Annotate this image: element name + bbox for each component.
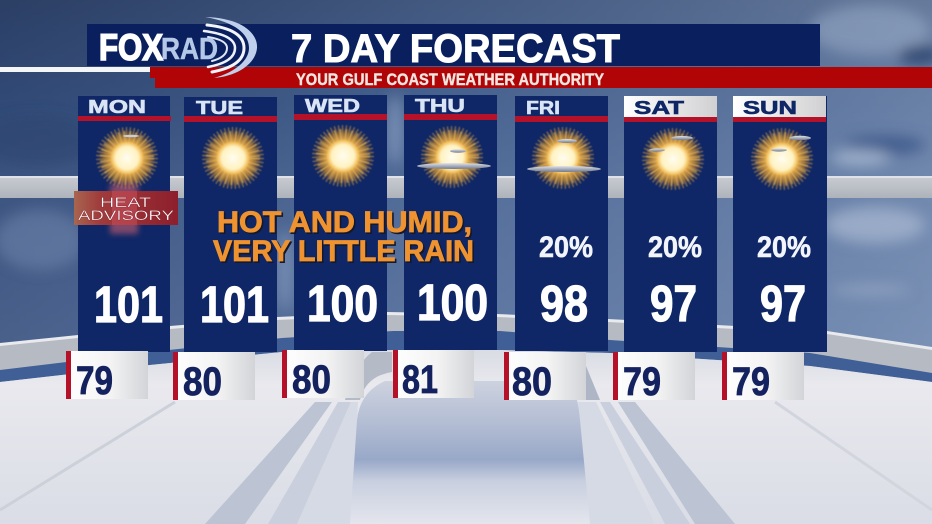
day label: THU bbox=[415, 96, 465, 116]
low temperature: Saturday bbox=[613, 352, 695, 404]
logo: FOXRAD: RAD bbox=[161, 31, 218, 66]
center arch bbox=[345, 352, 392, 400]
red tagline bar bbox=[150, 67, 932, 88]
icon: sun with clouds bbox=[750, 127, 814, 191]
callout: hot and humid forecast text: VERY LITTLE RAIN bbox=[213, 235, 474, 268]
low temperature: Wednesday: 80 bbox=[292, 358, 331, 402]
day label: MON bbox=[88, 97, 146, 117]
callout: heat advisory: HEAT bbox=[100, 195, 151, 210]
callout: hot and humid forecast text: HOT AND HUMID, bbox=[217, 206, 472, 239]
icon: sun with clouds bbox=[527, 126, 601, 190]
rain chance: 20% bbox=[539, 231, 593, 264]
high temperature: 101 bbox=[94, 276, 163, 333]
rain chance: 20% bbox=[648, 231, 702, 264]
panel: Monday bbox=[78, 96, 171, 352]
low temperature: Monday bbox=[66, 351, 148, 403]
high temperature: 98 bbox=[540, 275, 588, 332]
panel: Tuesday bbox=[184, 97, 277, 352]
recess bbox=[350, 381, 590, 524]
title: 7 DAY FORECAST bbox=[291, 27, 620, 71]
low temperature: Monday: 79 bbox=[76, 359, 113, 403]
day label: TUE bbox=[196, 98, 243, 118]
high temperature: 100 bbox=[307, 275, 378, 332]
tagline: YOUR GULF COAST WEATHER AUTHORITY bbox=[296, 70, 605, 89]
callout: hot and humid forecast text: HOT AND HUMID, bbox=[218, 208, 474, 240]
logo: FOXRAD bbox=[99, 17, 257, 78]
icon: sun bbox=[95, 126, 159, 190]
low temperature: Thursday bbox=[393, 350, 474, 402]
icon: sun with clouds bbox=[417, 125, 491, 189]
low temperature: Sunday bbox=[722, 352, 804, 404]
low temperature: Tuesday bbox=[173, 352, 255, 404]
day label: SUN bbox=[743, 98, 797, 118]
rain chance: 20% bbox=[757, 231, 811, 264]
low temperature: Friday: 80 bbox=[512, 360, 552, 404]
high temperature: 101 bbox=[200, 276, 269, 333]
callout: hot and humid forecast text: VERY LITTLE RAIN bbox=[214, 236, 476, 270]
high temperature: 100 bbox=[417, 274, 488, 331]
low temperature: Thursday: 81 bbox=[402, 358, 438, 402]
icon: sun with clouds bbox=[641, 127, 705, 191]
header: title bar bbox=[0, 24, 932, 89]
low temperature: Friday bbox=[504, 352, 586, 404]
panel: Thursday bbox=[404, 95, 497, 350]
day label: WED bbox=[305, 96, 360, 116]
logo: FOXRAD: FOX bbox=[99, 27, 163, 68]
low temperature: Tuesday: 80 bbox=[183, 360, 222, 404]
low temperature: Wednesday bbox=[282, 350, 364, 402]
day label: SAT bbox=[634, 98, 684, 118]
icon: sun bbox=[201, 126, 265, 190]
callout: hot and humid forecast text bbox=[213, 206, 476, 270]
panel: Wednesday bbox=[294, 95, 387, 351]
day label: FRI bbox=[526, 98, 560, 118]
high temperature: 97 bbox=[650, 275, 697, 332]
panel: Sunday bbox=[733, 96, 827, 352]
recess walls bbox=[205, 402, 332, 524]
white rule bbox=[0, 67, 150, 72]
blue band bbox=[0, 331, 932, 382]
studio rail arch bbox=[0, 313, 932, 382]
icon: sun bbox=[311, 124, 375, 188]
low temperature: Sunday: 79 bbox=[732, 360, 770, 404]
callout: heat advisory: ADVISORY bbox=[78, 208, 174, 223]
floor bbox=[0, 350, 932, 524]
panel: Friday bbox=[515, 96, 608, 351]
panel: Saturday bbox=[624, 96, 717, 352]
navy title panel bbox=[87, 24, 820, 66]
callout: heat advisory bbox=[74, 184, 178, 234]
low temperature: Saturday: 79 bbox=[623, 360, 661, 404]
high temperature: 97 bbox=[760, 275, 806, 332]
